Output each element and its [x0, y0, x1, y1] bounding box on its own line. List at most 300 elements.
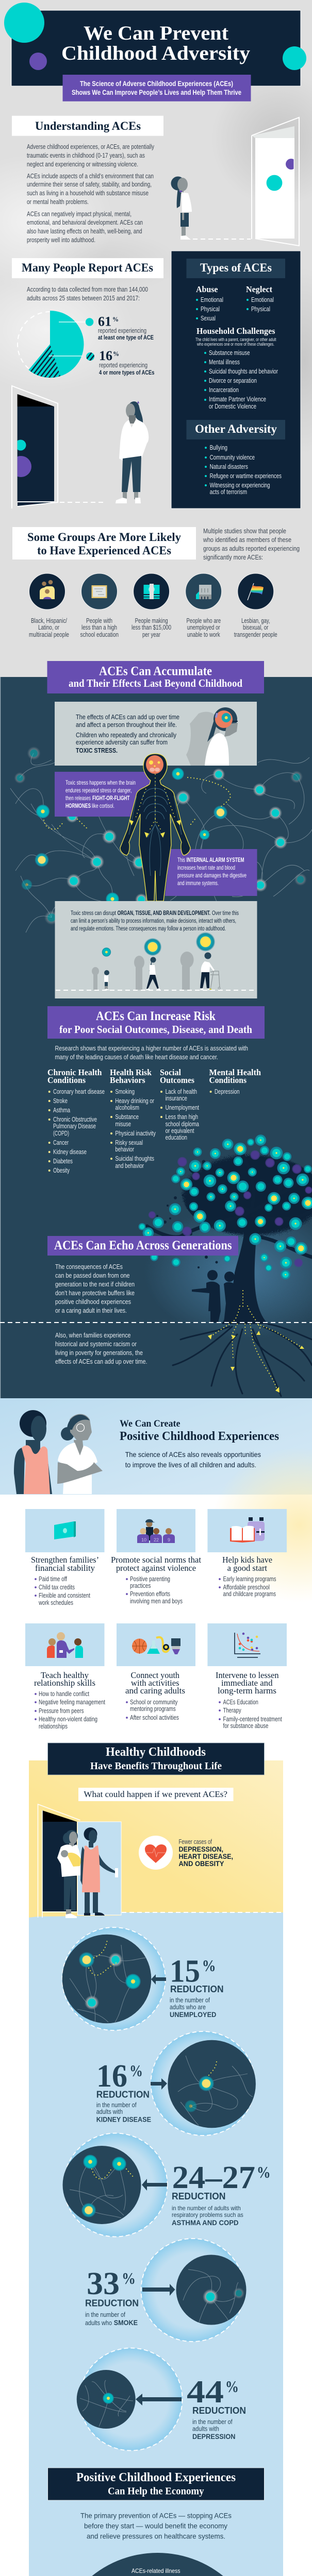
group: racial groups icon and label: Latino, or: [38, 624, 59, 631]
card: intervene: [207, 1623, 287, 1730]
card: social norms: Positive parenting: [130, 1575, 170, 1583]
background: grey upper section: [0, 0, 312, 677]
question label: What could happen if we prevent ACEs?: [84, 1789, 227, 1799]
stat: 33 percent smoke: %: [122, 2269, 136, 2287]
heading: healthy childhoods benefits: Healthy Childhoods: [106, 1745, 206, 1759]
list: household challenges: who experiences one or more of these challenges.: [196, 342, 274, 347]
column: mental health conditions: Depression: [215, 1088, 240, 1095]
shadows: [92, 952, 194, 990]
text block: organ development: can limit a person’s ability to process information, make decisions, interact with others,: [71, 918, 236, 924]
text block: organ development: Over time this: [212, 910, 239, 917]
group: income icon and label: per year: [142, 631, 160, 638]
text block: consequences passed down: [55, 1263, 135, 1314]
list: household challenges: Mental illness: [209, 359, 240, 366]
list: household challenges: Divorce or separation: [209, 377, 257, 384]
stat: 33 percent smoke: [85, 2239, 247, 2342]
stat: 24-27 percent asthma and COPD: ASTHMA AND COPD: [172, 2219, 239, 2227]
column: health risk behaviors: behavior: [115, 1146, 134, 1153]
panel: fight-or-flight: like cortisol.: [92, 802, 114, 809]
text block: definition of ACEs: ACEs can negatively impact physical, mental,: [27, 210, 132, 217]
card: connect youth: Connect youth: [131, 1670, 179, 1680]
column: health risk behaviors: Substance: [115, 1113, 139, 1121]
elder with walker: [199, 952, 220, 990]
list: abuse: [196, 284, 223, 322]
column: health risk behaviors: Physical inactivity: [115, 1130, 156, 1137]
column: social outcomes: Social: [160, 1067, 181, 1077]
panel: fight-or-flight: FIGHT-OR-FLIGHT: [92, 794, 130, 802]
text block: definition of ACEs: [27, 143, 155, 244]
text block: definition of ACEs: Adverse childhood experiences, or ACEs, are potentially: [27, 143, 155, 150]
panel: internal alarm system: [165, 849, 257, 896]
illustration: dark door: [10, 386, 105, 509]
column: health risk behaviors: Health Risk: [110, 1067, 152, 1077]
list: other adversity: Community violence: [210, 454, 255, 461]
group: unemployed icon and label: unemployed or: [187, 624, 220, 631]
text block: survey source: adults across 25 states between 2015 and 2017:: [27, 295, 140, 302]
card: good start: Early learning programs: [223, 1575, 276, 1583]
card: good start: Help kids have: [222, 1555, 272, 1565]
text block: definition of ACEs: also have lasting effects on health, well-being, and: [27, 228, 142, 235]
icon: officer with children: 9: [168, 1537, 170, 1543]
text block: effects add up: [76, 714, 179, 754]
list: other adversity: Witnessing or experiencing: [210, 482, 270, 489]
card: intervene: Intervene to lessen: [216, 1670, 279, 1680]
callout: 16 percent: 4 or more types of ACEs: [99, 369, 155, 376]
text block: research shows: Research shows that experiencing a higher number of ACEs is associated with: [55, 1044, 248, 1052]
panel: fight-or-flight: Toxic stress happens when the brain: [65, 779, 136, 786]
list: household challenges: The child lives with a parent, caregiver, or other adult: [195, 337, 276, 342]
group: unemployed icon and label: unable to work: [187, 631, 220, 638]
card: financial stability: Child tax credits: [39, 1584, 75, 1591]
icon: officer with children: 22: [154, 1537, 159, 1543]
column: social outcomes: Lack of health: [166, 1088, 197, 1095]
heading: other adversity: [187, 420, 285, 439]
card: connect youth: After school activities: [130, 1714, 179, 1721]
card: intervene: for substance abuse: [223, 1722, 269, 1730]
card: financial stability: work schedules: [38, 1599, 73, 1606]
group: unemployed icon and label: People who are: [187, 617, 221, 624]
pie chart: 61% and 16%: [18, 311, 155, 378]
background: soft yellow glow: [211, 1448, 312, 1602]
panel: internal alarm system: INTERNAL ALARM SYSTEM: [187, 856, 244, 863]
illustration: tree of glowing neurons: [138, 1134, 312, 1393]
list: abuse: Physical: [201, 306, 220, 313]
stat: 15 percent unemployed: UNEMPLOYED: [170, 2011, 217, 2019]
heading: we can create: We Can Create: [120, 1418, 180, 1429]
heading: ACEs accumulate: ACEs Can Accumulate: [99, 665, 212, 679]
card: social norms: [111, 1509, 201, 1605]
group: education icon and label: [80, 573, 119, 638]
stat: 24-27 percent asthma and COPD: %: [257, 2163, 271, 2181]
heading: some groups: to Have Experienced ACEs: [37, 544, 171, 557]
icon: officer with children: 10: [141, 1537, 146, 1543]
column: health risk behaviors: Risky sexual: [115, 1139, 143, 1146]
illustration: woman with brain: [186, 707, 238, 766]
heading: Many People Report ACEs: [12, 258, 163, 278]
card: financial stability: financial stability: [35, 1563, 95, 1573]
card: relationship skills: Negative feeling management: [39, 1699, 105, 1706]
group: income icon and label: People making: [135, 617, 168, 624]
callout: 61 percent: [59, 314, 154, 341]
column: social outcomes: [160, 1067, 199, 1141]
icon: teacher and students: [47, 1632, 83, 1658]
heading: echo across generations: [47, 1236, 238, 1256]
text block: definition of ACEs: ACEs include aspects of a child’s environment that can: [27, 173, 154, 180]
illustration: woman with glasses: [57, 1414, 103, 1494]
panel: fight-or-flight: then releases: [65, 794, 91, 802]
group: income icon and label: less than $15,000: [132, 624, 171, 631]
text block: racism and poverty: living in poverty for generations, the: [55, 1349, 143, 1357]
text block: definition of ACEs: traumatic events in childhood (0-17 years), such as: [27, 152, 145, 159]
stat: 15 percent unemployed: adults who are: [170, 2004, 206, 2011]
card: intervene: long-term harms: [218, 1686, 276, 1696]
panel: internal alarm system: increases heart rate and blood: [177, 864, 235, 871]
adult: [145, 957, 161, 990]
list: other adversity: acts of terrorism: [210, 488, 247, 496]
main title: We Can Prevent: [84, 22, 228, 44]
list: other adversity: Refugee or wartime experiences: [210, 472, 282, 480]
group: LGBT icon and label: [234, 573, 277, 638]
group: LGBT icon and label: transgender people: [234, 631, 277, 638]
card: connect youth: School or community: [130, 1699, 178, 1706]
list: abuse: Abuse: [196, 284, 218, 294]
text block: consequences passed down: can be passed down from one: [55, 1272, 130, 1279]
column: health risk behaviors: Heavy drinking or: [115, 1097, 154, 1105]
text block: primary prevention: [80, 2512, 232, 2540]
column: social outcomes: Outcomes: [160, 1075, 194, 1085]
heading: help the economy: [48, 2468, 264, 2500]
text block: organ development: [71, 910, 239, 932]
card: financial stability: Flexible and consistent: [39, 1592, 90, 1599]
callout: 61 percent: %: [112, 315, 119, 323]
group: income icon and label: [132, 573, 171, 638]
heading: ACEs increase risk: [47, 1006, 265, 1039]
column: health risk behaviors: Suicidal thoughts: [115, 1155, 154, 1162]
stat: 44 percent depression: 44: [187, 2375, 224, 2410]
column: chronic health conditions: Stroke: [53, 1097, 68, 1105]
text block: definition of ACEs: such as living in a household with substance misuse: [27, 190, 149, 197]
callout: 16 percent: reported experiencing: [99, 362, 147, 369]
heading: ACEs increase risk: for Poor Social Outcomes, Disease, and Death: [59, 1023, 252, 1036]
stat: 15 percent unemployed: REDUCTION: [170, 1984, 224, 1994]
heading: other adversity: Other Adversity: [195, 422, 277, 435]
card: relationship skills: relationship skills: [34, 1678, 95, 1688]
stat: 16 percent kidney disease: [96, 2031, 256, 2136]
group: LGBT icon and label: Lesbian, gay,: [241, 617, 270, 624]
illustration: tree background glow and roots: [144, 1154, 312, 1404]
heading: ACEs increase risk: ACEs Can Increase Risk: [96, 1009, 216, 1023]
child: [103, 970, 110, 990]
group: education icon and label: school education: [80, 631, 119, 638]
list: household challenges: Intimate Partner Violence: [209, 396, 266, 403]
card: connect youth: [117, 1623, 195, 1721]
text block: consequences passed down: or a caring adult in their lives.: [55, 1307, 127, 1314]
heading: help the economy: Can Help the Economy: [108, 2486, 204, 2497]
text block: effects add up: and affect a person throughout their life.: [76, 721, 177, 728]
card: good start: Affordable preschool: [223, 1584, 270, 1591]
panel: internal alarm system: pressure and damages the digestive: [177, 872, 247, 879]
heart icon and callout: [139, 1836, 233, 1870]
column: health risk behaviors: Behaviors: [110, 1075, 145, 1085]
text block: definition of ACEs: or mental health problems.: [27, 198, 89, 206]
panel: positive childhood experiences intro: [0, 1398, 312, 1495]
callout: 61 percent: reported experiencing: [98, 327, 146, 334]
heading: we can create: [120, 1418, 279, 1443]
card: social norms: involving men and boys: [130, 1598, 183, 1605]
heart icon and callout: HEART DISEASE,: [178, 1852, 233, 1860]
list: other adversity: Natural disasters: [210, 463, 248, 470]
illustration: life stages with growing neurons: [56, 933, 257, 990]
card: relationship skills: relationships: [39, 1723, 68, 1730]
group: education icon and label: People with: [86, 617, 112, 624]
column: social outcomes: or equivalent: [166, 1127, 194, 1134]
main title: [61, 22, 251, 64]
column: chronic health conditions: Conditions: [47, 1075, 86, 1085]
column: chronic health conditions: Asthma: [53, 1107, 70, 1114]
heart icon and callout: Fewer cases of: [178, 1838, 212, 1845]
column: health risk behaviors: and behavior: [115, 1162, 144, 1170]
group: education icon and label: less than a high: [81, 624, 117, 631]
callout: 61 percent: 61: [98, 314, 111, 329]
icon: book and backpack: [230, 1517, 265, 1543]
card: relationship skills: [25, 1623, 105, 1730]
stat: 44 percent depression: [77, 2348, 246, 2450]
column: mental health conditions: [209, 1067, 261, 1095]
card: relationship skills: Pressure from peers: [39, 1707, 84, 1715]
card: financial stability: Paid time off: [39, 1575, 67, 1583]
older woman with baby: [57, 1830, 81, 1918]
list: other adversity: Bullying: [210, 444, 227, 451]
stat: 16 percent kidney disease: in the number of: [96, 2102, 137, 2109]
stat: 24-27 percent asthma and COPD: [63, 2133, 271, 2237]
icon: ball, flask, sax, brush: [132, 1637, 180, 1654]
text block: definition of ACEs: neglect and experiencing or witnessing violence.: [27, 161, 138, 168]
stat: 33 percent smoke: 33: [87, 2266, 120, 2301]
text block: racism and poverty: [55, 1331, 147, 1365]
list: abuse: Emotional: [201, 296, 223, 303]
stat: 24-27 percent asthma and COPD: REDUCTION: [172, 2191, 226, 2201]
icon: officer with children: [137, 1519, 175, 1543]
list: other adversity: [205, 444, 282, 496]
panel: fight-or-flight: [55, 772, 152, 817]
text block: opportunities: The science of ACEs also reveals opportunities: [125, 1450, 261, 1459]
panel: internal alarm system: This: [177, 856, 185, 863]
stat: 33 percent smoke: adults who: [85, 2319, 112, 2327]
column: chronic health conditions: (COPD): [53, 1130, 69, 1137]
text block: consequences passed down: positive childhood experiences: [55, 1298, 131, 1306]
text block: organ development: Toxic stress can disrupt: [71, 910, 117, 917]
card: good start: [207, 1509, 287, 1598]
group: LGBT icon and label: bisexual, or: [243, 624, 268, 631]
text block: racism and poverty: Also, when families experience: [55, 1331, 131, 1339]
illustration: woman in coral dress: [14, 1410, 52, 1494]
callout: 16 percent: 16: [99, 348, 112, 363]
illustration: nervous system figure: [120, 754, 190, 901]
text block: effects add up: The effects of ACEs can add up over time: [76, 714, 179, 721]
text block: primary prevention: before they start — would benefit the economy: [84, 2522, 227, 2530]
panel: fight-or-flight: endures repeated stress or danger,: [65, 787, 132, 794]
group: unemployed icon and label: [186, 573, 222, 638]
text block: primary prevention: The primary prevention of ACEs — stopping ACEs: [80, 2512, 232, 2520]
illustration: girl looking at door: [171, 176, 192, 240]
text block: organ development: ORGAN, TISSUE, AND BRAIN DEVELOPMENT.: [118, 910, 210, 917]
text block: research shows: many of the leading causes of death like heart disease and cancer.: [55, 1053, 218, 1061]
card: social norms: Prevention efforts: [130, 1590, 170, 1598]
heading: healthy childhoods benefits: Have Benefits Throughout Life: [90, 1760, 222, 1772]
column: social outcomes: insurance: [166, 1095, 187, 1102]
illustration: door with family: [38, 1804, 121, 1918]
text: 748 billion: ACEs-related illness: [132, 2567, 180, 2574]
decorative circles: [4, 3, 306, 70]
background: white section: [0, 1495, 312, 2576]
silhouettes of two people: [192, 1270, 236, 1323]
card: intervene: ACEs Education: [223, 1699, 258, 1706]
panel: development over life: [55, 901, 257, 998]
column: mental health conditions: Conditions: [209, 1075, 247, 1085]
list: household challenges: Substance misuse: [209, 349, 250, 357]
heading: some groups: [12, 527, 196, 560]
text block: racism and poverty: historical and systemic racism or: [55, 1340, 137, 1348]
card: connect youth: with activities: [131, 1678, 179, 1688]
panel: toxic stress intro: [55, 702, 257, 766]
subtitle banner: Shows We Can Improve People’s Lives and Help Them Thrive: [72, 89, 241, 96]
list: neglect: Emotional: [251, 296, 274, 303]
list: household challenges: Household Challenges: [196, 326, 275, 336]
group: racial groups icon and label: Black, Hispanic/: [31, 617, 67, 624]
text block: effects add up: Children who repeatedly and chronically: [76, 732, 177, 739]
heart icon and callout: DEPRESSION,: [178, 1845, 223, 1853]
panel: types of ACEs: [171, 251, 301, 509]
column: social outcomes: education: [166, 1134, 187, 1141]
card: social norms: protect against violence: [116, 1563, 196, 1573]
heading: ACEs accumulate: [47, 661, 264, 693]
column: social outcomes: Less than high: [166, 1113, 198, 1121]
text block: survey source: [27, 286, 148, 302]
list: neglect: [246, 284, 274, 313]
panel: dark blue section background: [0, 677, 312, 1398]
card: financial stability: Strengthen families’: [31, 1555, 99, 1565]
column: mental health conditions: Mental Health: [209, 1067, 261, 1077]
pie: 748 billion with 10 percent slice: [92, 2553, 223, 2576]
heading: we can create: Positive Childhood Experiences: [120, 1430, 279, 1443]
card: good start: and childcare programs: [223, 1590, 276, 1598]
card: intervene: Family-centered treatment: [223, 1716, 282, 1723]
column: health risk behaviors: alcoholism: [115, 1104, 139, 1111]
icon: cash: [54, 1521, 76, 1539]
card: financial stability: [25, 1509, 104, 1606]
panel: yellow benefits scene: [29, 1760, 283, 1918]
woman at doorknob: [80, 1827, 118, 1916]
heading: help the economy: Positive Childhood Experiences: [76, 2471, 236, 2484]
text block: definition of ACEs: undermine their sense of safety, stability, and bonding,: [27, 181, 152, 188]
text block: opportunities: [125, 1450, 261, 1469]
illustration: open bright door: [193, 117, 299, 246]
text block: racism and poverty: effects of ACEs can add up over time.: [55, 1358, 147, 1365]
card: social norms: practices: [130, 1582, 151, 1589]
card: intervene: Therapy: [223, 1707, 241, 1714]
subtitle banner: The Science of Adverse Childhood Experiences (ACEs): [80, 80, 233, 88]
column: social outcomes: Unemployment: [166, 1104, 199, 1111]
heading: some groups: Some Groups Are More Likely: [27, 531, 181, 544]
text block: organ development: and regulate emotions. These consequences may follow a person into adulthood.: [71, 926, 226, 932]
stat: 33 percent smoke: REDUCTION: [85, 2298, 139, 2309]
heading: echo across generations: ACEs Can Echo Across Generations: [54, 1239, 232, 1252]
heading: ACEs accumulate: and Their Effects Last Beyond Childhood: [69, 677, 242, 689]
title banner: [4, 3, 306, 101]
text block: opportunities: to improve the lives of all children and adults.: [125, 1461, 256, 1469]
dashed ground: [122, 1912, 283, 1913]
text block: definition of ACEs: prosperity well into adulthood.: [27, 236, 95, 244]
card: good start: a good start: [227, 1563, 267, 1573]
column: chronic health conditions: [47, 1067, 105, 1174]
stat: 15 percent unemployed: 15: [170, 1954, 200, 1989]
panel: blue benefits background: [29, 1906, 283, 2576]
group: racial groups icon and label: [29, 573, 69, 638]
stat: 16 percent kidney disease: 16: [96, 2059, 127, 2094]
column: chronic health conditions: Pulmonary Disease: [53, 1123, 96, 1130]
column: chronic health conditions: Coronary heart disease: [53, 1088, 105, 1095]
heading: healthy childhoods benefits: [48, 1743, 264, 1775]
list: neglect: Physical: [251, 306, 270, 313]
list: neglect: Neglect: [246, 284, 272, 294]
heading: types of ACEs: [187, 259, 285, 278]
list columns: health outcomes: [47, 1067, 261, 1174]
list: household challenges: [195, 326, 278, 410]
stat: 24-27 percent asthma and COPD: respiratory problems such as: [172, 2211, 243, 2218]
text block: consequences passed down: don’t have protective buffers like: [55, 1289, 135, 1297]
heading: Understanding ACEs: [12, 116, 163, 136]
stat: 16 percent kidney disease: KIDNEY DISEASE: [96, 2116, 151, 2124]
heart icon and callout: AND OBESITY: [178, 1859, 224, 1868]
card: relationship skills: How to handle conflict: [39, 1690, 89, 1698]
main title: Childhood Adversity: [61, 42, 251, 64]
card: relationship skills: Teach healthy: [41, 1670, 89, 1680]
text block: multiple studies: [203, 528, 300, 561]
ground line: [0, 1322, 312, 1323]
column: chronic health conditions: Chronic Health: [47, 1067, 102, 1077]
heading: Many People Report ACEs: Many People Report ACEs: [22, 261, 153, 274]
stat: 16 percent kidney disease: adults with: [96, 2108, 123, 2115]
text block: effects add up: experience adversity can suffer from: [76, 739, 168, 746]
text block: multiple studies: who identified as members of these: [203, 536, 291, 544]
card: connect youth: and caring adults: [125, 1686, 185, 1696]
text block: effects add up: TOXIC STRESS.: [76, 747, 118, 754]
text block: multiple studies: groups as adults reported experiencing: [203, 545, 300, 552]
text block: consequences passed down: generation to the next if children: [55, 1280, 135, 1288]
text block: definition of ACEs: emotional, and behavioral development. ACEs can: [27, 219, 143, 226]
column: chronic health conditions: Obesity: [53, 1167, 70, 1174]
panel: internal alarm system: and immune systems.: [177, 879, 219, 887]
heading: Understanding ACEs: Understanding ACEs: [35, 120, 141, 132]
column: health risk behaviors: [110, 1067, 156, 1170]
stat: 44 percent depression: REDUCTION: [192, 2405, 246, 2416]
illustration: woman facing dark door: [116, 401, 149, 503]
panel: fight-or-flight: HORMONES: [65, 802, 91, 809]
card: relationship skills: Healthy non-violent dating: [39, 1716, 97, 1723]
stat: 44 percent depression: adults with: [192, 2426, 219, 2433]
question label: [78, 1788, 233, 1801]
column: chronic health conditions: Chronic Obstructive: [53, 1116, 97, 1123]
list: household challenges: or Domestic Violence: [209, 403, 256, 410]
text block: primary prevention: and relieve pressures on healthcare systems.: [87, 2532, 225, 2540]
icon: scatter chart: [235, 1633, 260, 1657]
text block: survey source: According to data collected from more than 144,000: [27, 286, 148, 293]
stat: 15 percent unemployed: in the number of: [170, 1997, 210, 2004]
column: health risk behaviors: Smoking: [115, 1088, 135, 1095]
list: household challenges: Suicidal thoughts and behavior: [209, 368, 278, 375]
card: social norms: Promote social norms that: [111, 1555, 201, 1565]
stat: 33 percent smoke: in the number of: [85, 2311, 125, 2318]
